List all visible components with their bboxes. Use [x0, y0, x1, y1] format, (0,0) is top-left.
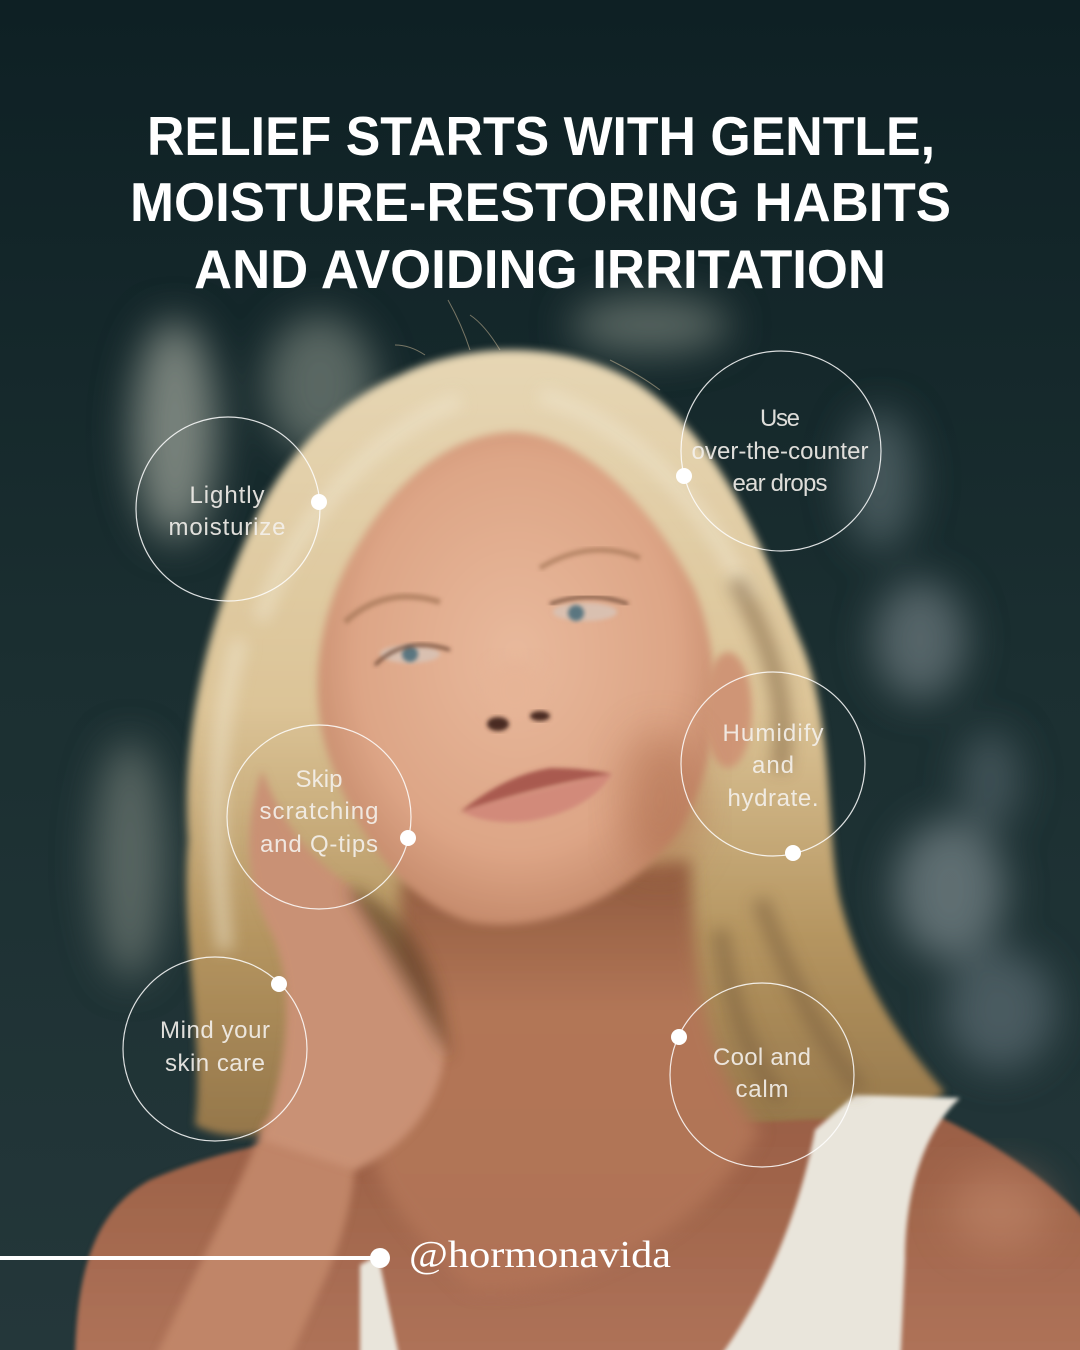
callout: humidify and hydrate: [681, 672, 865, 861]
callout: skip scratching: scratching: [260, 798, 378, 825]
callout: ear drops: over-the-counter: [692, 438, 868, 465]
title: AND AVOIDING IRRITATION: [194, 238, 886, 300]
white top: [710, 1095, 960, 1350]
right eyebrow: [540, 550, 640, 568]
flyaway hairs: [395, 300, 660, 390]
callout: mind your skin care: [123, 957, 307, 1141]
brand handle: [0, 1234, 671, 1276]
callout: cool and calm: [670, 983, 854, 1167]
shoulder highlight: [950, 1170, 1050, 1250]
callout: cool and calm: Cool and: [713, 1044, 811, 1071]
forearm: [150, 1120, 355, 1350]
callout: skip scratching: and Q-tips: [260, 831, 378, 858]
callout: ear drops: [676, 351, 881, 551]
callout: ear drops: ear drops: [732, 470, 828, 497]
hair: [186, 350, 945, 1138]
callout: skip scratching: [227, 725, 416, 909]
callout: mind your skin care: Mind your: [160, 1017, 270, 1044]
hand: [250, 770, 445, 1170]
dark shadow behind hand: [345, 885, 450, 1060]
neck: [370, 860, 760, 1291]
left eyebrow: [345, 597, 440, 622]
brand handle: @hormonavida: [409, 1234, 671, 1276]
white top left strap: [360, 1255, 402, 1350]
hair strand highlights: [217, 395, 750, 950]
callout: lightly moisturize: Lightly: [190, 482, 264, 509]
callout: lightly moisturize: [136, 417, 327, 601]
callout: skip scratching: Skip: [296, 766, 342, 793]
title: RELIEF STARTS WITH GENTLE,: [147, 105, 935, 167]
cheek shading: [620, 730, 700, 870]
title: MOISTURE-RESTORING HABITS: [130, 171, 951, 233]
blurred background foliage: [94, 297, 1055, 1070]
callout: humidify and hydrate: Humidify: [722, 720, 824, 747]
callout: lightly moisturize: moisturize: [168, 514, 286, 541]
title: [130, 105, 951, 300]
nose: [487, 660, 550, 731]
ear: [704, 652, 752, 768]
left eye: [375, 645, 450, 665]
callout: ear drops: Use: [760, 405, 800, 432]
callout: mind your skin care: skin care: [165, 1050, 265, 1077]
darker hair strands lower: [720, 580, 860, 1100]
callout: humidify and hydrate: and: [752, 752, 794, 779]
callout: humidify and hydrate: hydrate.: [728, 785, 818, 812]
shoulders and chest: [75, 1115, 1080, 1350]
right eye: [550, 597, 628, 621]
callout: cool and calm: calm: [736, 1076, 788, 1103]
face: [318, 432, 715, 925]
lips: [460, 768, 612, 822]
